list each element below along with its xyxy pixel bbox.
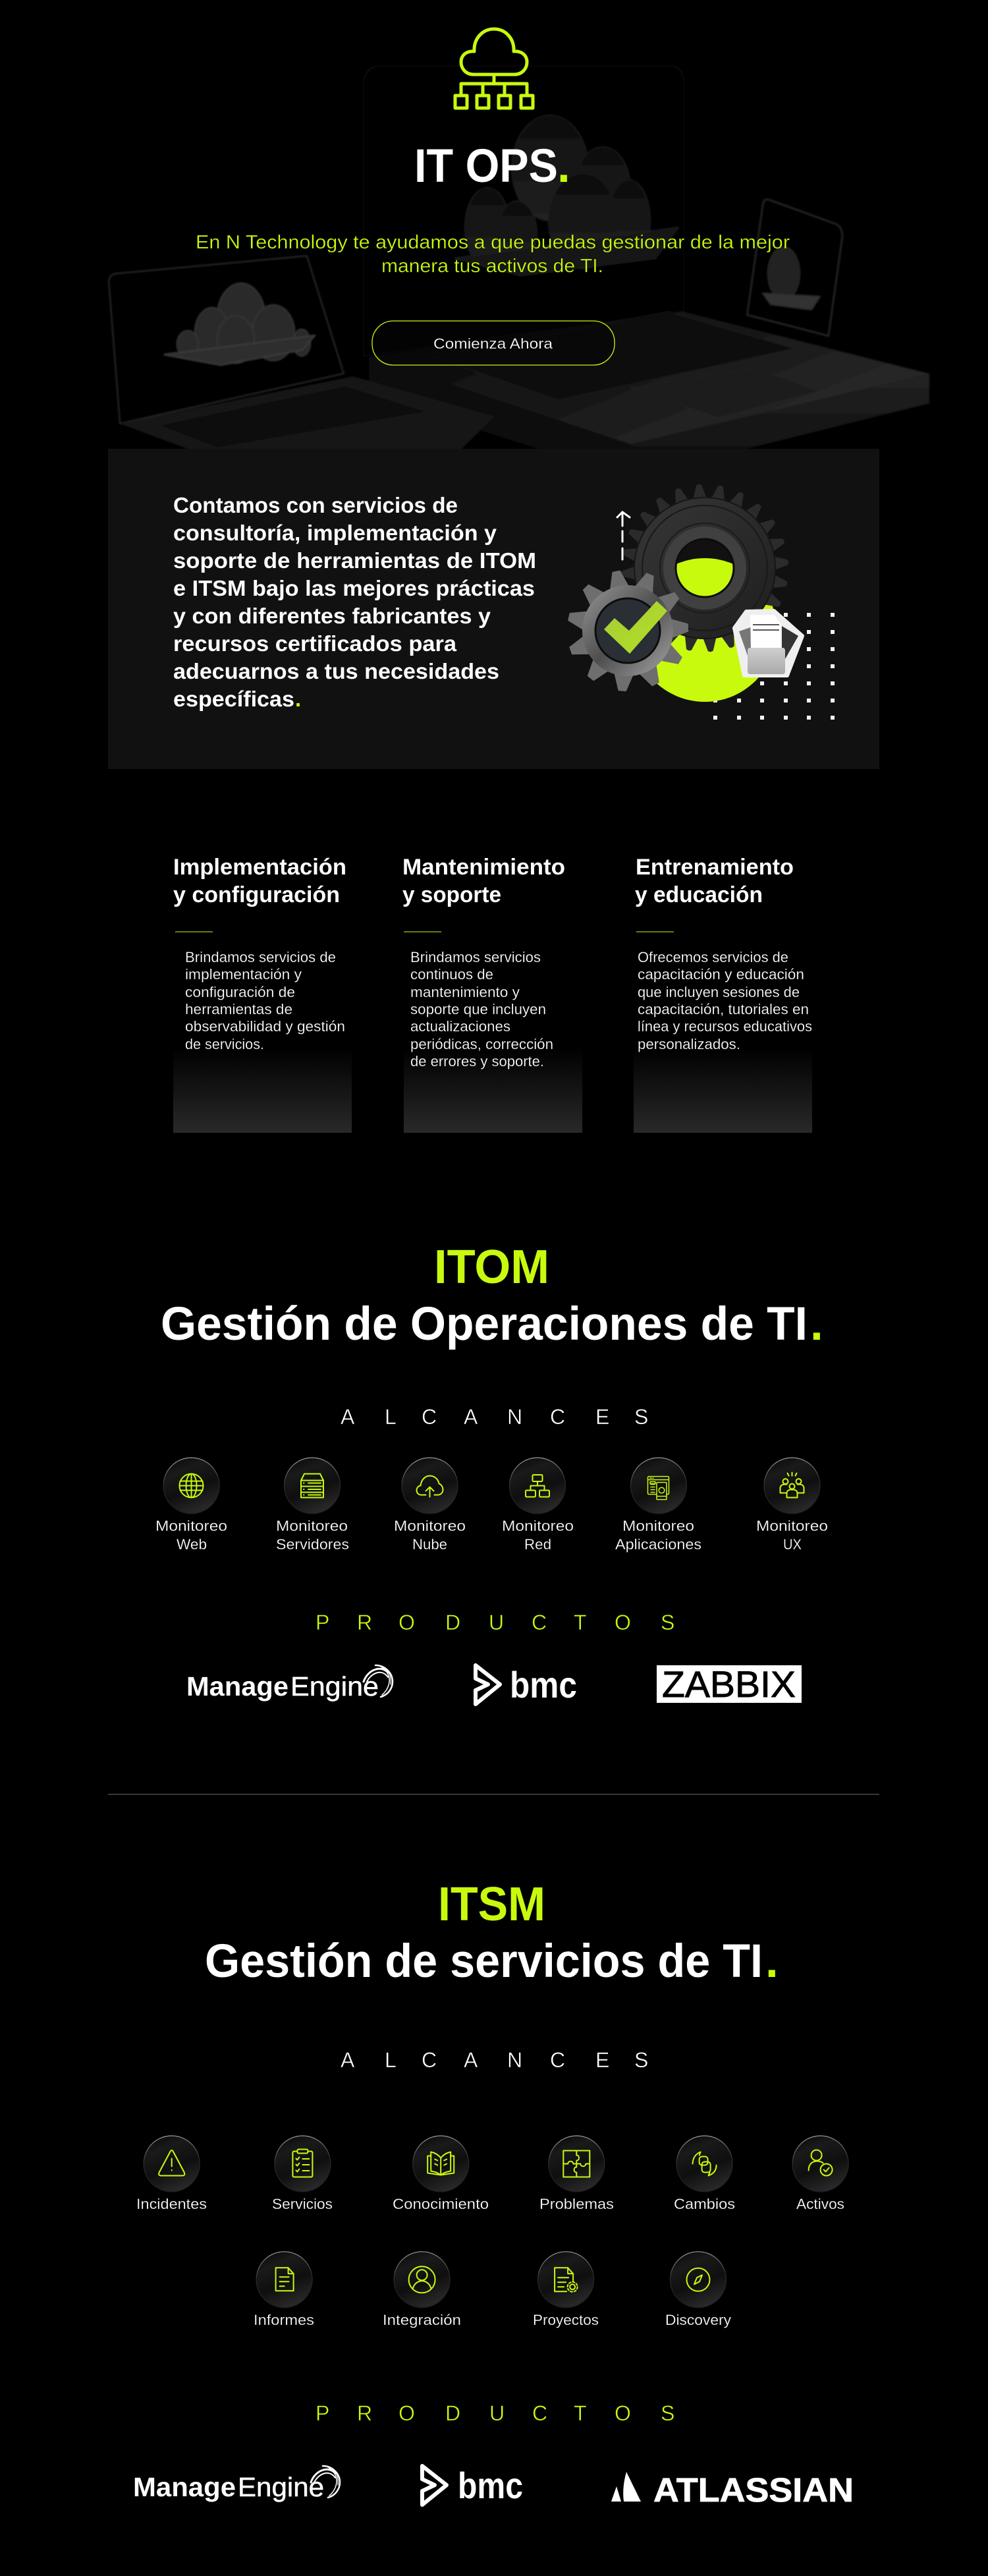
label: alcances ITSM: ALCANCES <box>341 2048 648 2072</box>
card text: Ofrecemos servicios de <box>638 949 788 965</box>
icon: globe <box>179 1474 203 1497</box>
card heading: y soporte <box>402 882 501 907</box>
card heading <box>173 855 346 907</box>
icon: warning <box>159 2150 184 2176</box>
center laptop trackpad <box>630 368 819 418</box>
item: incidentes: Incidentes <box>136 2196 207 2212</box>
arrow up <box>617 512 630 559</box>
intro paragraph: Contamos con servicios de <box>173 493 458 517</box>
item: conocimiento <box>393 2136 489 2212</box>
card text: Brindamos servicios <box>410 949 541 965</box>
icon: puzzle <box>563 2151 590 2177</box>
card heading <box>402 855 565 907</box>
item: servicios <box>272 2136 333 2212</box>
small gear <box>566 569 689 692</box>
card heading <box>635 855 794 907</box>
label: productos ITOM: PRODUCTOS <box>316 1611 674 1634</box>
item: monitoreo aplicaciones: Aplicaciones <box>615 1536 701 1553</box>
large gear <box>620 484 789 652</box>
card text: actualizaciones <box>410 1018 510 1035</box>
intro paragraph: . <box>295 687 301 711</box>
icon: cloud upload <box>416 1476 443 1497</box>
item: monitoreo web <box>155 1458 227 1553</box>
icon: server <box>301 1474 323 1497</box>
item: monitoreo aplicaciones <box>615 1458 701 1553</box>
left laptop keyboard <box>158 386 428 448</box>
card text <box>185 949 345 1052</box>
item: discovery <box>665 2252 731 2328</box>
item: informes <box>254 2252 314 2328</box>
item: conocimiento: Conocimiento <box>393 2196 489 2212</box>
card text: observabilidad y gestión <box>185 1018 345 1035</box>
icon: document <box>276 2268 294 2291</box>
heading: ITOM <box>161 1241 823 1350</box>
item: monitoreo UX: Monitoreo <box>756 1518 828 1534</box>
card text: capacitación y educación <box>638 966 804 983</box>
panel: intro <box>108 449 879 769</box>
item: monitoreo aplicaciones: Monitoreo <box>622 1518 694 1534</box>
logo: ManageEngine <box>133 2466 340 2502</box>
card text: Brindamos servicios de <box>185 949 336 965</box>
card: implementación <box>173 855 352 1133</box>
card text: continuos de <box>410 966 493 983</box>
heading: ITOM: Gestión de Operaciones de TI <box>161 1298 808 1350</box>
folder sticker <box>734 611 802 675</box>
item: monitoreo nube: Monitoreo <box>394 1518 466 1534</box>
heading: ITOM: . <box>810 1298 823 1350</box>
card heading: Mantenimiento <box>402 855 565 880</box>
item: integración: Integración <box>383 2312 461 2328</box>
item: monitoreo UX: UX <box>783 1536 802 1553</box>
item: monitoreo web: Monitoreo <box>155 1518 227 1534</box>
left cloud <box>177 283 310 363</box>
logo: Zabbix: ZABBIX <box>662 1663 796 1705</box>
logo: ManageEngine: Manage <box>186 1671 288 1702</box>
center laptop base <box>369 312 929 444</box>
icon: document with gear <box>555 2268 578 2292</box>
divider <box>108 1794 879 1795</box>
item: cambios: Cambios <box>674 2196 735 2212</box>
card text: periódicas, corrección <box>410 1036 553 1052</box>
item: cambios <box>674 2136 735 2212</box>
item: proyectos <box>533 2252 599 2328</box>
hero subtitle: En N Technology te ayudamos a que puedas gestionar de la mejor <box>196 232 790 253</box>
call to action button <box>372 321 615 365</box>
item: monitoreo servidores: Servidores <box>276 1536 349 1553</box>
card text <box>410 949 553 1070</box>
card heading: Implementación <box>173 855 346 880</box>
item: integración <box>383 2252 461 2328</box>
heading: ITOM: ITOM <box>434 1241 549 1294</box>
intro paragraph: soporte de herramientas de ITOM <box>173 548 536 573</box>
hero subtitle <box>196 232 790 277</box>
item: problemas <box>539 2136 614 2212</box>
card text: línea y recursos educativos <box>638 1018 812 1035</box>
intro paragraph: e ITSM bajo las mejores prácticas <box>173 576 535 600</box>
card text: herramientas de <box>185 1001 292 1017</box>
item: activos <box>792 2136 848 2212</box>
illustration: gears, check and folder <box>566 484 835 720</box>
card text: mantenimiento y <box>410 984 520 1000</box>
item: proyectos: Proyectos <box>533 2312 599 2328</box>
label: productos ITSM: PRODUCTOS <box>316 2401 674 2425</box>
item: monitoreo servidores: Monitoreo <box>276 1518 348 1534</box>
left laptop screen <box>109 256 344 424</box>
logo: bmc: bmc <box>458 2465 523 2506</box>
item: monitoreo UX <box>756 1458 828 1553</box>
card text: que incluyen sesiones de <box>638 984 800 1000</box>
item: monitoreo nube: Nube <box>412 1536 447 1553</box>
card text: de servicios. <box>185 1036 264 1052</box>
center laptop side wall <box>369 357 630 478</box>
card: entrenamiento <box>634 855 812 1133</box>
left laptop base <box>120 376 495 449</box>
logo: bmc: bmc <box>510 1664 577 1705</box>
center cloud <box>465 115 650 268</box>
card text: implementación y <box>185 966 302 983</box>
logo: ManageEngine <box>186 1665 393 1702</box>
icon: compass <box>686 2268 710 2291</box>
icon: open book <box>427 2152 454 2175</box>
item: monitoreo red: Red <box>524 1536 551 1553</box>
hero title: IT OPS <box>414 140 558 192</box>
item: activos: Activos <box>796 2196 844 2212</box>
item: monitoreo red <box>502 1458 574 1553</box>
icon: user in circle <box>409 2266 435 2293</box>
item: monitoreo web: Web <box>177 1536 207 1553</box>
center laptop screen <box>364 66 684 356</box>
icon: users <box>780 1472 804 1497</box>
label: alcances ITOM: ALCANCES <box>341 1405 648 1429</box>
icon: user check <box>809 2150 833 2176</box>
hero subtitle: manera tus activos de TI. <box>381 256 603 277</box>
card text: soporte que incluyen <box>410 1001 546 1017</box>
left cloud platform <box>164 335 315 365</box>
hero icon: cloud network <box>455 29 533 108</box>
logo: bmc <box>422 2465 523 2506</box>
item: servicios: Servicios <box>272 2196 333 2212</box>
logo: bmc <box>476 1664 577 1705</box>
item: monitoreo servidores <box>276 1458 349 1553</box>
call to action button: Comienza Ahora <box>433 335 553 352</box>
logo: Atlassian: ATLASSIAN <box>653 2471 854 2509</box>
intro paragraph: específicas <box>173 687 294 711</box>
icon: change cycle <box>693 2152 717 2176</box>
dot grid <box>713 613 835 720</box>
icon: clipboard <box>292 2150 312 2177</box>
tablet cloud <box>763 247 820 310</box>
card text <box>638 949 812 1052</box>
heading: ITSM <box>205 1878 779 1988</box>
card heading: y configuración <box>173 882 340 907</box>
card text: de errores y soporte. <box>410 1053 544 1070</box>
logo: ManageEngine: Engine <box>290 1671 379 1702</box>
card text: personalizados. <box>638 1036 740 1052</box>
lime circle <box>633 558 777 702</box>
intro paragraph <box>173 493 536 711</box>
icon: network <box>526 1475 549 1497</box>
intro paragraph: recursos certificados para <box>173 631 457 656</box>
item: problemas: Problemas <box>539 2196 614 2212</box>
intro paragraph: consultoría, implementación y <box>173 521 497 545</box>
item: incidentes <box>136 2136 207 2212</box>
icon: application window <box>648 1476 669 1500</box>
item: informes: Informes <box>254 2312 314 2328</box>
heading: ITSM: ITSM <box>438 1878 545 1931</box>
logo: ManageEngine: Manage <box>133 2472 236 2502</box>
center laptop keyboard <box>435 312 794 400</box>
tablet <box>747 199 842 336</box>
check mark <box>604 601 667 654</box>
heading: ITSM: Gestión de servicios de TI <box>205 1935 763 1988</box>
intro paragraph: adecuarnos a tus necesidades <box>173 659 499 683</box>
heading: ITSM: . <box>765 1935 779 1988</box>
center laptop front edge <box>630 374 929 478</box>
hero title: . <box>557 140 570 192</box>
card text: configuración de <box>185 984 295 1000</box>
item: discovery: Discovery <box>665 2312 731 2328</box>
logo: ManageEngine: Engine <box>238 2472 324 2502</box>
card heading: Entrenamiento <box>636 855 794 880</box>
card text: capacitación, tutoriales en <box>638 1001 809 1017</box>
center cloud platform <box>454 227 678 275</box>
intro paragraph: y con diferentes fabricantes y <box>173 604 491 628</box>
card: mantenimiento <box>402 855 582 1133</box>
card heading: y educación <box>635 882 763 907</box>
hero background: laptops with cloud <box>109 66 929 478</box>
item: monitoreo red: Monitoreo <box>502 1518 574 1534</box>
item: monitoreo nube <box>394 1458 466 1553</box>
